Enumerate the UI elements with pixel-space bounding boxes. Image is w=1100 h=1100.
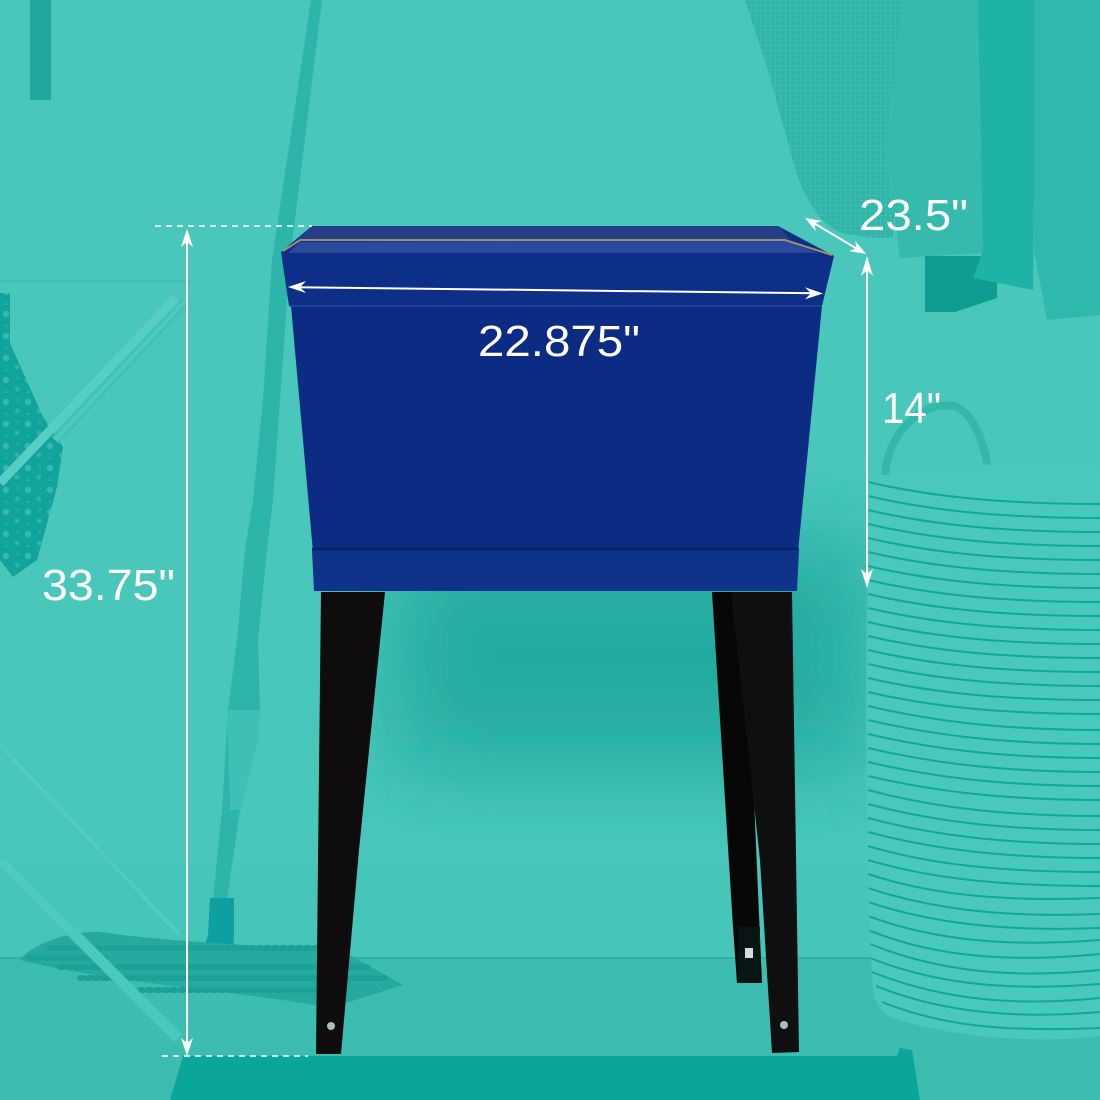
hanging clothes bbox=[745, 0, 1100, 320]
green floor mat bbox=[170, 1048, 920, 1100]
mop bbox=[20, 0, 403, 1038]
laundry basket bbox=[866, 405, 1100, 1039]
dimension: tub height 14 bbox=[861, 256, 941, 588]
dimension: depth 23.5 bbox=[805, 191, 968, 254]
dimension: height 33.75 bbox=[42, 226, 312, 1056]
drying rack bbox=[0, 281, 190, 935]
dimension: depth 23.5: 23.5" bbox=[859, 191, 968, 240]
utility tub legs bbox=[316, 592, 799, 1054]
dimension: tub height 14: 14" bbox=[882, 384, 941, 433]
dimension: height 33.75: 33.75" bbox=[42, 561, 175, 610]
wall hook bbox=[30, 0, 51, 100]
utility tub body bbox=[281, 226, 834, 591]
dimension: width 22.875: 22.875" bbox=[478, 317, 640, 366]
dimension: width 22.875 bbox=[288, 281, 823, 366]
